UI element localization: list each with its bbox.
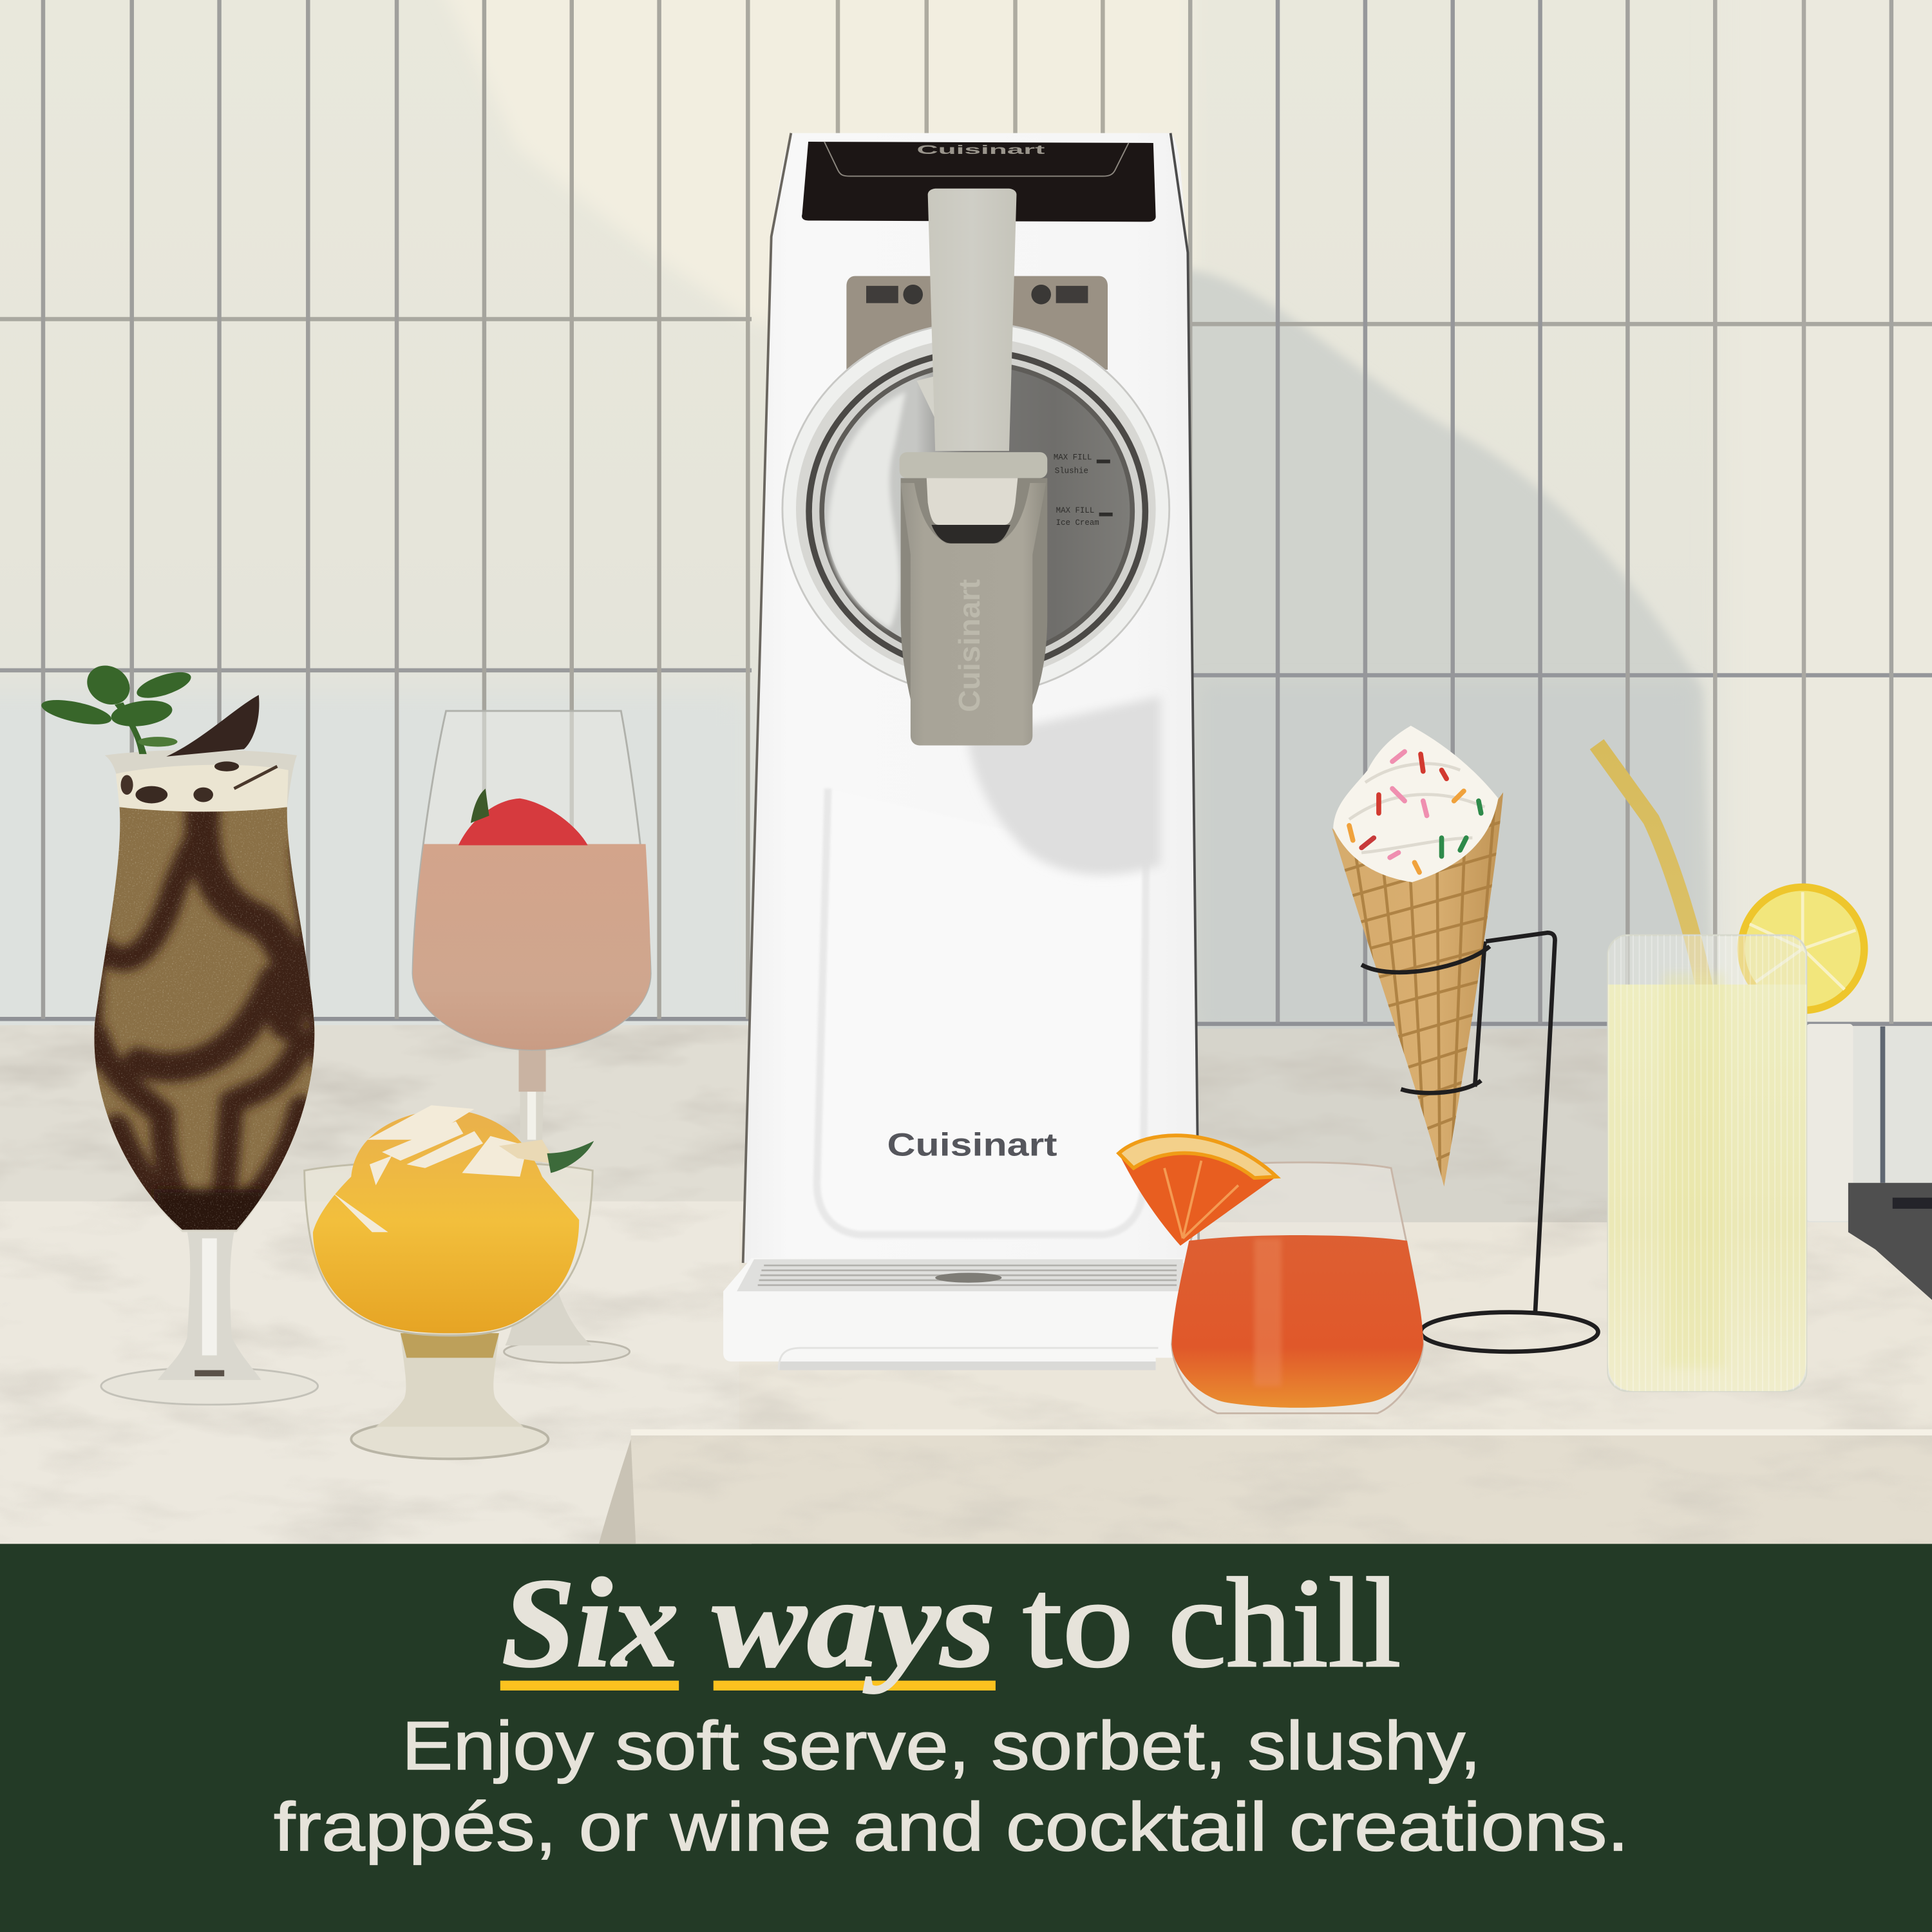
tall lemonade glass [1597,744,1868,1391]
brand logo: Cuisinart [887,1127,1057,1163]
soft serve [1333,726,1499,882]
hurricane glass with chocolate frappe [39,658,323,1405]
headline: Six [502,1553,679,1694]
headline: ways [712,1553,996,1694]
blood orange cocktail [1119,1135,1423,1414]
front recess [817,788,1146,1235]
mint sprig [39,658,194,754]
subheading: Enjoy soft serve, sorbet, slushy, [402,1707,1481,1784]
strawberry [459,799,588,845]
nozzle body [901,483,1046,746]
handle flange [900,452,1047,478]
whipped cream and cookies [116,761,289,811]
handle stalk [928,189,1016,451]
max fill labels: MAX FILL [1056,506,1094,515]
max fill labels: Slushie [1055,467,1088,476]
spout shadow [967,696,1160,875]
machine body [743,133,1199,1263]
headline: chill [1168,1553,1401,1694]
max fill labels [1054,453,1113,527]
stand [1421,933,1598,1352]
glass ribbing [1608,935,1806,1391]
waffle cone with soft serve in stand [1325,726,1598,1368]
mango scoop and pool [313,1109,579,1333]
green caption band [0,1545,1932,1932]
power outlet and stove at right [1806,1024,1932,1300]
headline: to [1023,1553,1133,1694]
glass [1608,935,1806,1391]
headline [502,1553,1401,1694]
tiled wall background [0,0,1932,1059]
drip tray [723,1258,1183,1370]
orange slice garnish [1119,1135,1276,1245]
wine glass with strawberry slushy [413,711,650,1363]
embossed nozzle logo: Cuisinart [952,579,986,712]
machine cast shadow on tiles [1183,269,1715,1035]
control panel: Cuisinart [916,144,1046,157]
nozzle back wings [901,478,1047,705]
marble backsplash [0,1025,1932,1229]
coconut flakes [333,1105,557,1232]
stand rings [1361,946,1490,1093]
frost on drum [828,392,905,629]
max fill labels: Ice Cream [1056,518,1099,527]
handle fin [916,376,936,421]
lemon slice [1738,884,1868,1014]
subheading: frappés, or wine and cocktail creations. [274,1788,1629,1866]
control panel [802,142,1156,222]
max fill labels: MAX FILL [1054,453,1092,462]
chocolate drink with swirl [86,801,323,1238]
mint garnish [547,1141,594,1173]
Cuisinart machine [723,133,1199,1370]
chocolate shard [166,695,259,757]
cone [1332,792,1503,1186]
subheading [274,1707,1629,1866]
plunger plug and slot [927,478,1018,544]
sundae bowl with mango sorbet [305,1105,594,1459]
sprinkles [1349,752,1481,873]
gold straw [1597,744,1705,992]
clear lid ring [782,323,1170,695]
stainless back plate [846,276,1108,370]
marble countertop [0,1201,1932,1544]
lemonade [1608,985,1806,1391]
headline underlines [500,1681,996,1690]
